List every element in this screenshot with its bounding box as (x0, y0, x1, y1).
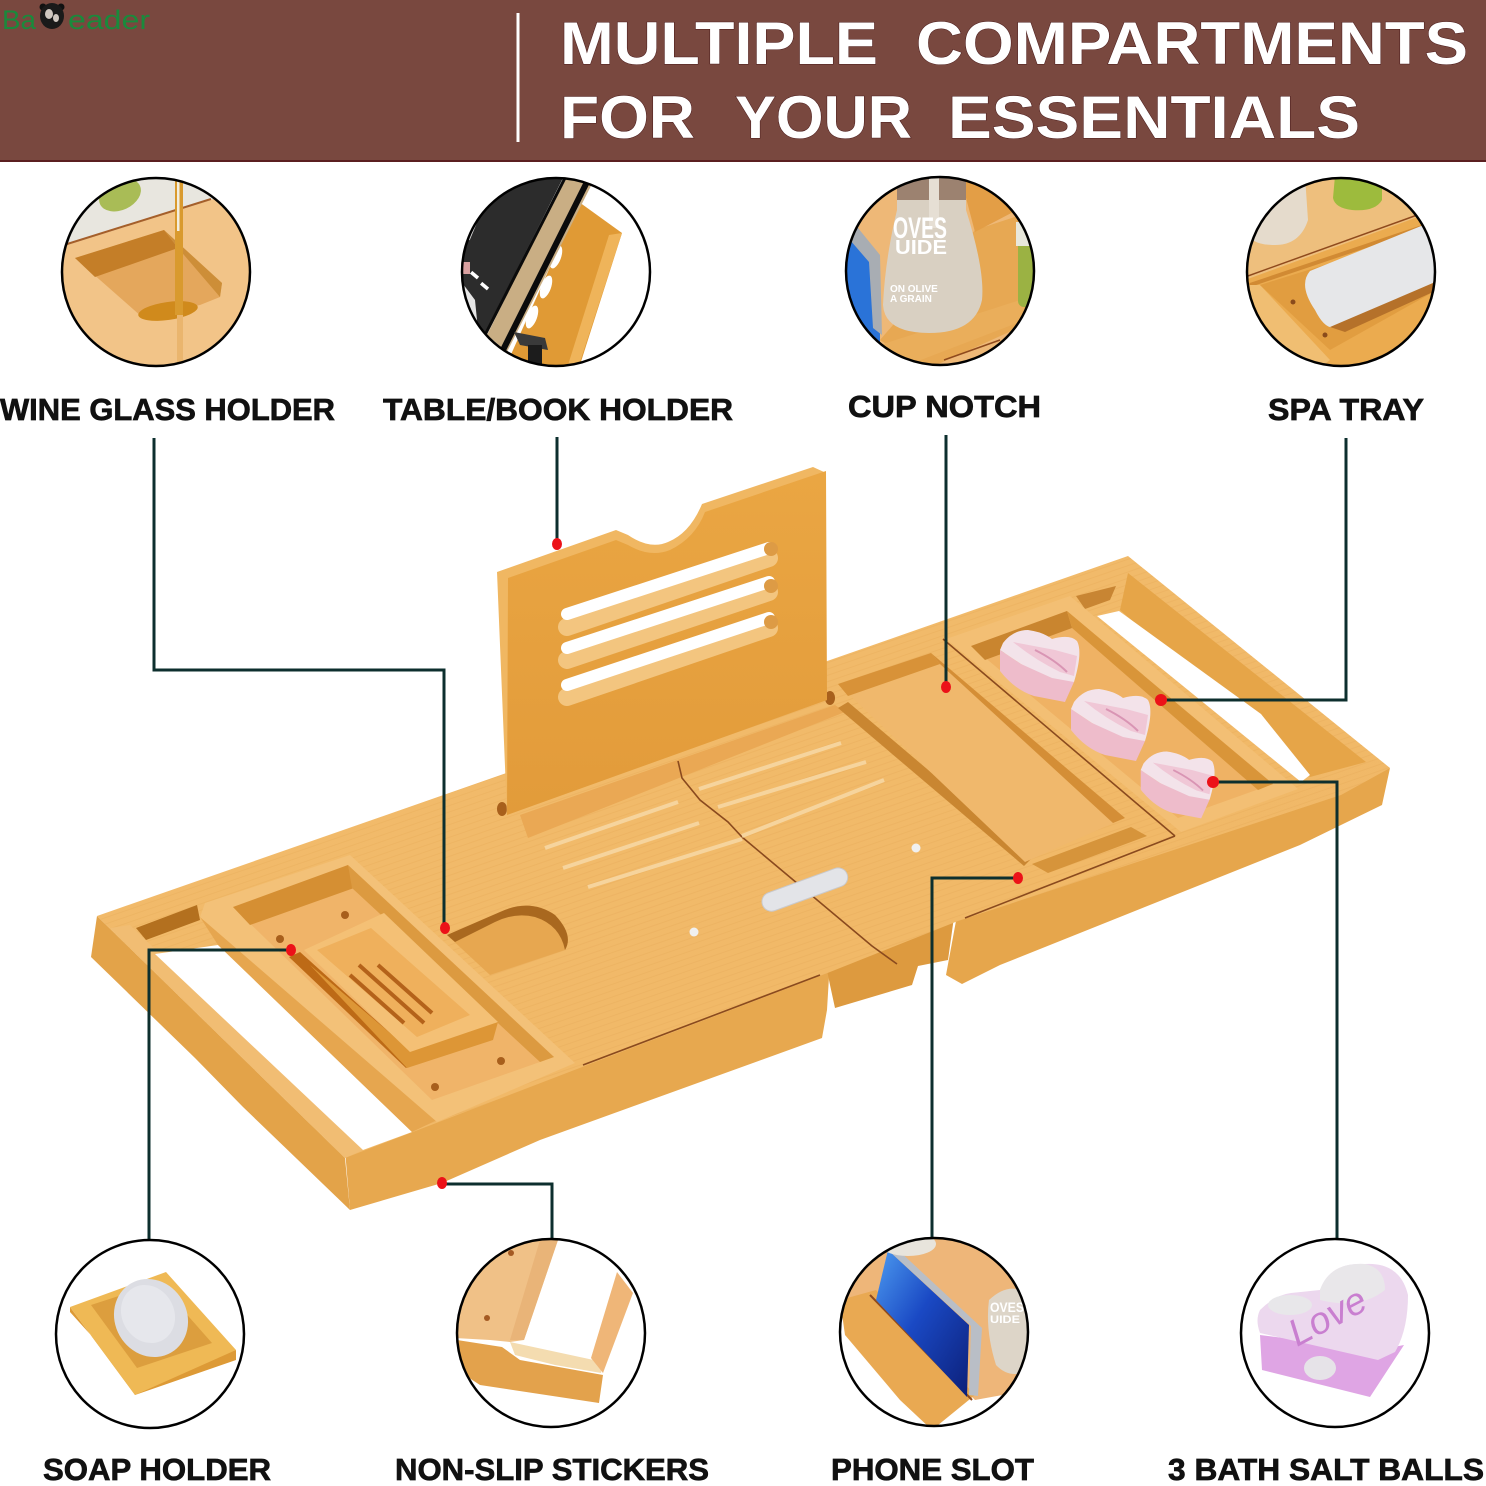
circle: phone slot (840, 1232, 1030, 1430)
watermark logo: eader (68, 5, 150, 35)
label: cup notch: CUP NOTCH (848, 389, 1041, 424)
watermark logo (2, 3, 150, 35)
label: soap holder: SOAP HOLDER (43, 1452, 271, 1486)
label: phone slot: PHONE SLOT (831, 1452, 1034, 1486)
tray seams (583, 639, 1175, 1065)
board holes (497, 691, 835, 816)
right end pocket (1076, 586, 1116, 609)
tray outer side by opening (200, 917, 437, 1132)
title: FOR (560, 84, 695, 151)
spa tray floor (971, 611, 1273, 818)
grooves on deck (545, 743, 884, 887)
right frame inner wall (1120, 573, 1366, 777)
tray top surface (97, 556, 1390, 1158)
circle: cup notch: UIDE (895, 237, 947, 259)
callout: bath salt leader (1207, 776, 1337, 1240)
cup notch recess (838, 653, 1125, 862)
label: spa tray: SPA TRAY (1268, 392, 1424, 427)
circle: cup notch: A GRAIN (890, 294, 932, 305)
soap tray rim (200, 855, 575, 1122)
bamboo caddy tray (91, 467, 1390, 1210)
label: non-slip stickers: NON-SLIP STICKERS (395, 1452, 709, 1486)
wine glass notch (447, 906, 568, 975)
phone slot recess (1032, 827, 1147, 873)
callout: phone slot leader (932, 872, 1023, 1238)
callout: cup notch leader (941, 435, 951, 693)
tablet recess wall (838, 702, 1032, 866)
circle: phone slot: OVES (990, 1299, 1024, 1315)
circle: soap holder (56, 1240, 244, 1428)
circle: phone slot: UIDE (990, 1314, 1020, 1326)
circle: cup notch: ON OLIVE (890, 284, 938, 295)
callout: spa tray leader (1155, 438, 1346, 706)
header banner (0, 0, 1486, 162)
label: bath salt balls: 3 BATH SALT BALLS (1168, 1452, 1484, 1486)
silver plate (759, 865, 850, 914)
book holder slots (567, 542, 778, 697)
left end pocket (136, 905, 200, 940)
book lip recess (520, 705, 845, 838)
circle: bath salt ball: Love (1282, 1279, 1374, 1355)
watermark logo: Ba (2, 5, 37, 35)
circle: non-slip stickers (455, 1239, 645, 1427)
soap tray recess (233, 865, 554, 1100)
left white opening (155, 945, 412, 1150)
circle: book holder (460, 176, 652, 369)
callout: soap holder leader (149, 944, 296, 1240)
left arm strip (110, 925, 363, 1158)
bath salt heart 3 (1141, 751, 1215, 818)
callout: non-slip leader (437, 1177, 552, 1240)
bath salt heart 1 (1000, 630, 1079, 702)
callout: book holder leader (552, 437, 562, 550)
right white opening (1097, 611, 1310, 782)
callout: wine glass holder leader (154, 438, 450, 934)
soap dish (304, 913, 498, 1068)
title: ESSENTIALS (948, 84, 1360, 151)
label: table/book holder: TABLE/BOOK HOLDER (383, 392, 733, 427)
title (560, 10, 1468, 151)
bath salt heart 2 (1071, 689, 1150, 761)
circle: spa tray (1245, 176, 1437, 368)
spa tray rim (946, 596, 1298, 832)
white dots (690, 844, 920, 936)
circle: wine glass holder (60, 172, 252, 368)
label: wine glass holder: WINE GLASS HOLDER (0, 392, 335, 427)
title: MULTIPLE (560, 10, 878, 77)
title: YOUR (735, 84, 912, 151)
title: COMPARTMENTS (916, 10, 1468, 77)
circle: cup notch (844, 175, 1040, 370)
book holder board (497, 467, 827, 815)
tray side faces (91, 768, 1390, 1210)
circle: cup notch: OVES (893, 212, 947, 245)
circle: bath salt ball (1241, 1239, 1429, 1427)
